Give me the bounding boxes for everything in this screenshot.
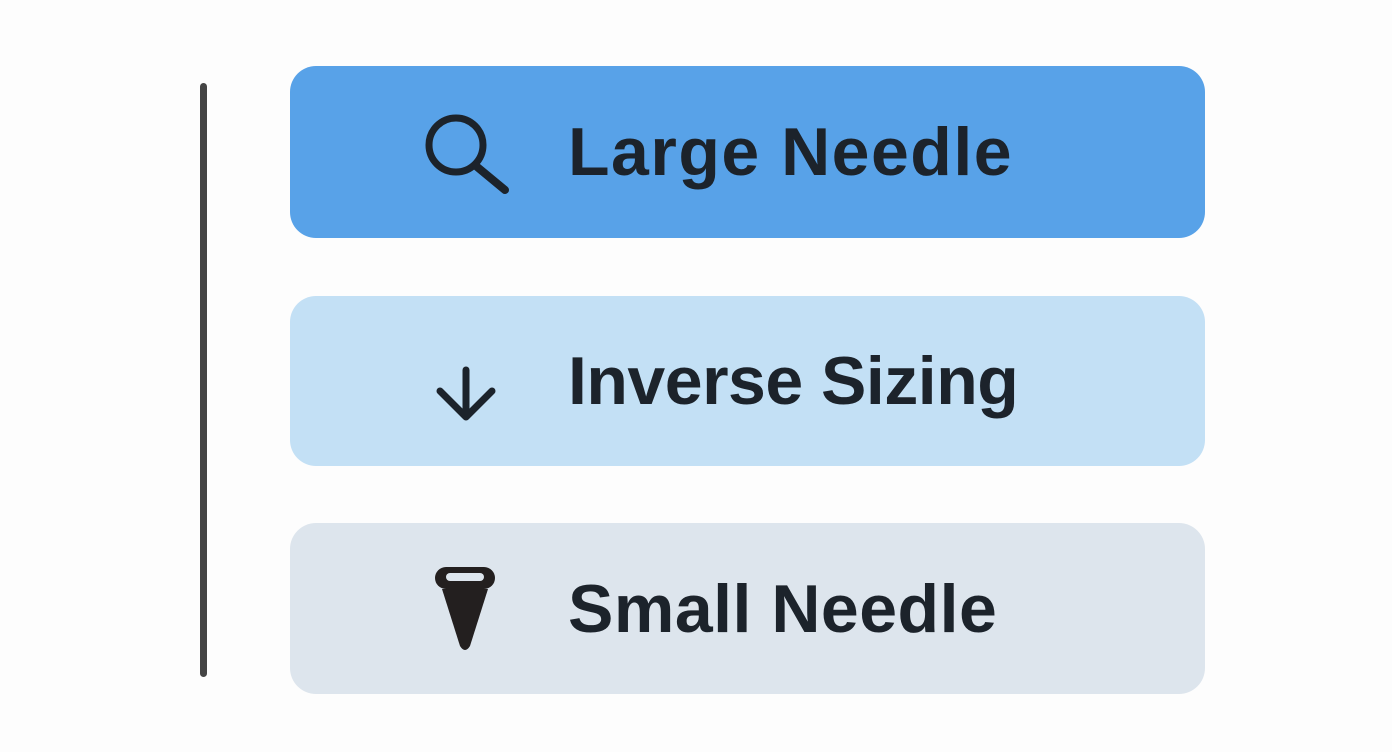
icon: down arrow — [436, 366, 496, 420]
panel: small needle — [290, 523, 1205, 694]
heading: Large Needle: Large Needle — [568, 114, 1013, 190]
vertical line — [200, 83, 207, 677]
icon: needle — [435, 567, 495, 650]
heading: Inverse Sizing: Inverse Sizing — [568, 343, 1018, 419]
icon: magnifier — [426, 114, 509, 194]
heading: Small Needle: Small Needle — [568, 571, 997, 647]
panel: inverse sizing — [290, 296, 1205, 466]
panel: large needle — [290, 66, 1205, 238]
